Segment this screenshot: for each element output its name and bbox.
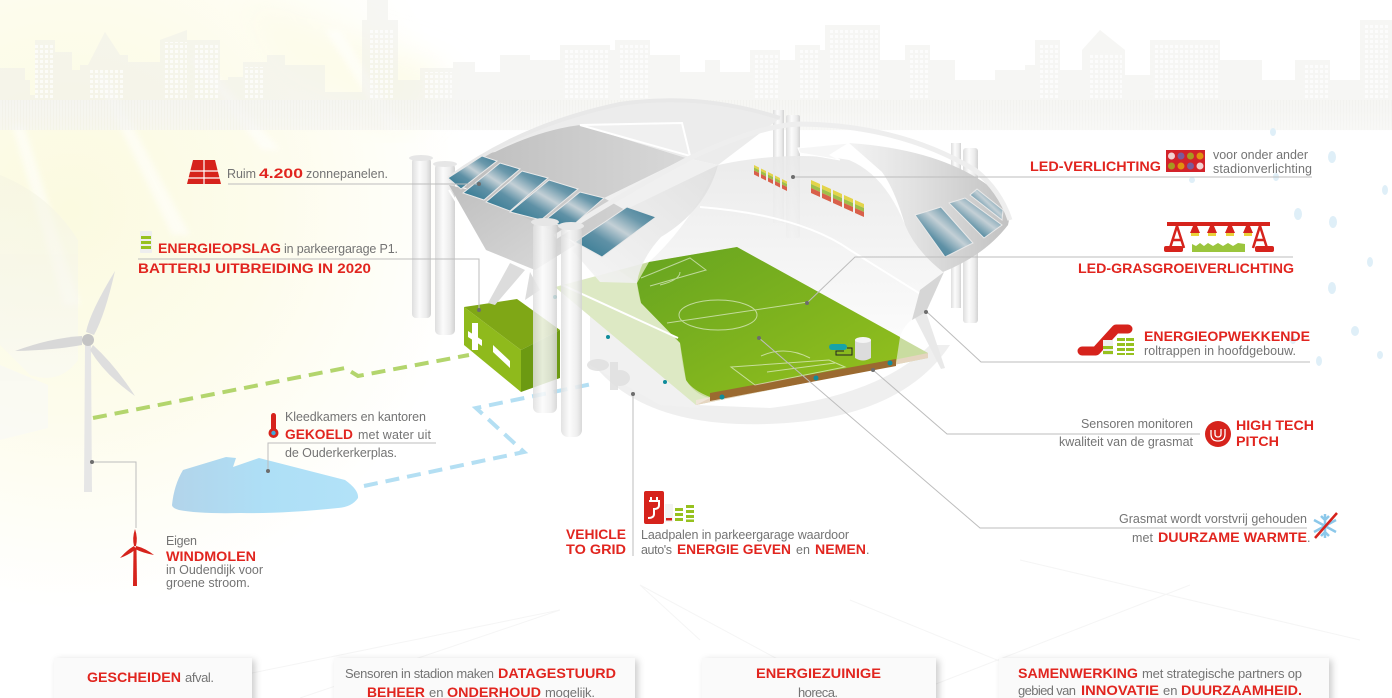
annotation: wind turbine: in Oudendijk voor [166, 563, 263, 577]
annotation: LED lighting [791, 148, 1312, 179]
bowl base ring [590, 345, 950, 424]
floor grid lines [130, 560, 1360, 698]
annotation: solar panels [187, 160, 481, 186]
skyline [0, 0, 1392, 132]
annotation: durable heat: . [1307, 531, 1310, 545]
annotation: energy escalators: roltrappen in hoofdgebouw. [1144, 344, 1296, 358]
roof truss arches [555, 124, 1010, 237]
card: waste: GESCHEIDEN [87, 669, 181, 685]
annotation: energy storage [138, 231, 481, 312]
icon: pitch sensor [1205, 421, 1231, 447]
annotation: cooled with lake water: GEKOELD [285, 427, 353, 442]
annotation: wind turbine: groene stroom. [166, 576, 250, 590]
battery block [464, 299, 560, 392]
annotation: LED lighting: voor onder ander [1213, 148, 1308, 162]
blue water pipe (dashed) [364, 384, 592, 486]
upper roof light band [449, 100, 780, 178]
annotation: grass growth lights [805, 222, 1294, 305]
annotation: cooled with lake water: de Ouderkerkerplas. [285, 446, 397, 460]
raindrops [1189, 128, 1388, 366]
card: data-driven management [334, 658, 635, 698]
icon: solar panels [187, 160, 221, 184]
lake [172, 457, 358, 513]
annotation: vehicle to grid: Laadpalen in parkeergarage waardoor [641, 528, 849, 542]
annotation: vehicle to grid: . [866, 543, 869, 557]
annotation: wind turbine: Eigen [166, 534, 197, 548]
annotation: durable heat [757, 336, 1337, 545]
icon: LED panel [1166, 150, 1205, 172]
annotation: LED lighting: LED-VERLICHTING [1030, 159, 1161, 174]
icon: thermometer [268, 413, 278, 438]
annotation: cooled with lake water [266, 410, 436, 473]
solar panels right [915, 189, 1003, 257]
sensor device [829, 337, 871, 360]
annotation: cooled with lake water: Kleedkamers en kantoren [285, 410, 426, 424]
card: catering [702, 658, 936, 698]
card: catering: ENERGIEZUINIGE [756, 665, 881, 681]
green power cable (dashed) [93, 355, 469, 418]
card: data-driven management: DATAGESTUURD [498, 665, 616, 681]
annotation: wind turbine [90, 460, 263, 590]
annotation: energy escalators: ENERGIEOPWEKKENDE [1144, 329, 1310, 344]
annotation: durable heat: DUURZAME WARMTE [1158, 530, 1307, 545]
annotation: wind turbine: WINDMOLEN [166, 549, 256, 564]
background sun rays [0, 0, 520, 640]
annotation: vehicle to grid: NEMEN [815, 542, 866, 557]
annotation: energy escalators [924, 310, 1310, 362]
annotation: vehicle to grid: TO GRID [566, 542, 626, 557]
left roof [449, 125, 686, 242]
annotation: high tech pitch: Sensoren monitoren [1081, 417, 1193, 431]
right roof [849, 143, 1009, 272]
icon: snowflake crossed out [1314, 513, 1337, 538]
annotation: vehicle to grid: VEHICLE [566, 527, 626, 542]
card: partnership [999, 658, 1329, 698]
annotation: solar panels: zonnepanelen. [306, 167, 388, 181]
annotation: energy storage: BATTERIJ UITBREIDING IN 2020 [138, 261, 371, 276]
annotation: high tech pitch: HIGH TECH [1236, 418, 1314, 433]
annotation: durable heat: met [1132, 531, 1154, 545]
annotation: vehicle to grid: en [796, 543, 810, 557]
card: partnership: INNOVATIE [1081, 682, 1159, 698]
annotation: energy storage: in parkeergarage P1. [284, 242, 398, 256]
stadium curtain and roof [448, 100, 1010, 405]
icon: charging post and batteries [644, 491, 694, 524]
annotation: durable heat: Grasmat wordt vorstvrij gehouden [1119, 512, 1307, 526]
card: waste [54, 658, 252, 698]
annotation: solar panels: 4.200 [259, 166, 303, 181]
annotation: vehicle to grid [566, 392, 869, 557]
front pillars [531, 218, 584, 437]
annotation: cooled with lake water: met water uit [358, 428, 432, 442]
card: partnership: met strategische partners op [1142, 666, 1302, 681]
annotation: high tech pitch: kwaliteit van de grasmat [1059, 435, 1194, 449]
annotation: energy storage: ENERGIEOPSLAG [158, 241, 281, 256]
card: partnership: gebied van [1018, 683, 1076, 698]
solar panels left [448, 156, 656, 257]
card: partnership: en [1163, 683, 1177, 698]
card: partnership: DUURZAAMHEID. [1181, 682, 1302, 698]
annotation: LED lighting: stadionverlichting [1213, 162, 1312, 176]
card: waste: afval. [185, 670, 214, 685]
annotation: high tech pitch: PITCH [1236, 434, 1279, 449]
icon: red windmill [120, 529, 154, 586]
pitch [553, 247, 928, 405]
annotation: vehicle to grid: auto's [641, 543, 672, 557]
annotation: solar panels: Ruim [227, 167, 256, 181]
icon: grass growth light rig [1164, 222, 1274, 252]
background building silhouette left [0, 175, 78, 440]
card: data-driven management: Sensoren in stadion maken [345, 666, 494, 681]
icon: escalator and batteries [1082, 329, 1134, 355]
wind turbine [15, 271, 135, 492]
back pillars [409, 110, 978, 335]
icon: battery [140, 231, 152, 253]
stadium back [409, 110, 978, 408]
LED stadium lights [754, 165, 864, 217]
generator icon under stand [587, 359, 630, 390]
annotation: vehicle to grid: ENERGIE GEVEN [677, 542, 791, 557]
annotation: grass growth lights: LED-GRASGROEIVERLICHTING [1078, 261, 1294, 276]
card: partnership: SAMENWERKING [1018, 665, 1138, 681]
truss ribbon [604, 158, 718, 210]
annotation: high tech pitch [871, 368, 1314, 449]
